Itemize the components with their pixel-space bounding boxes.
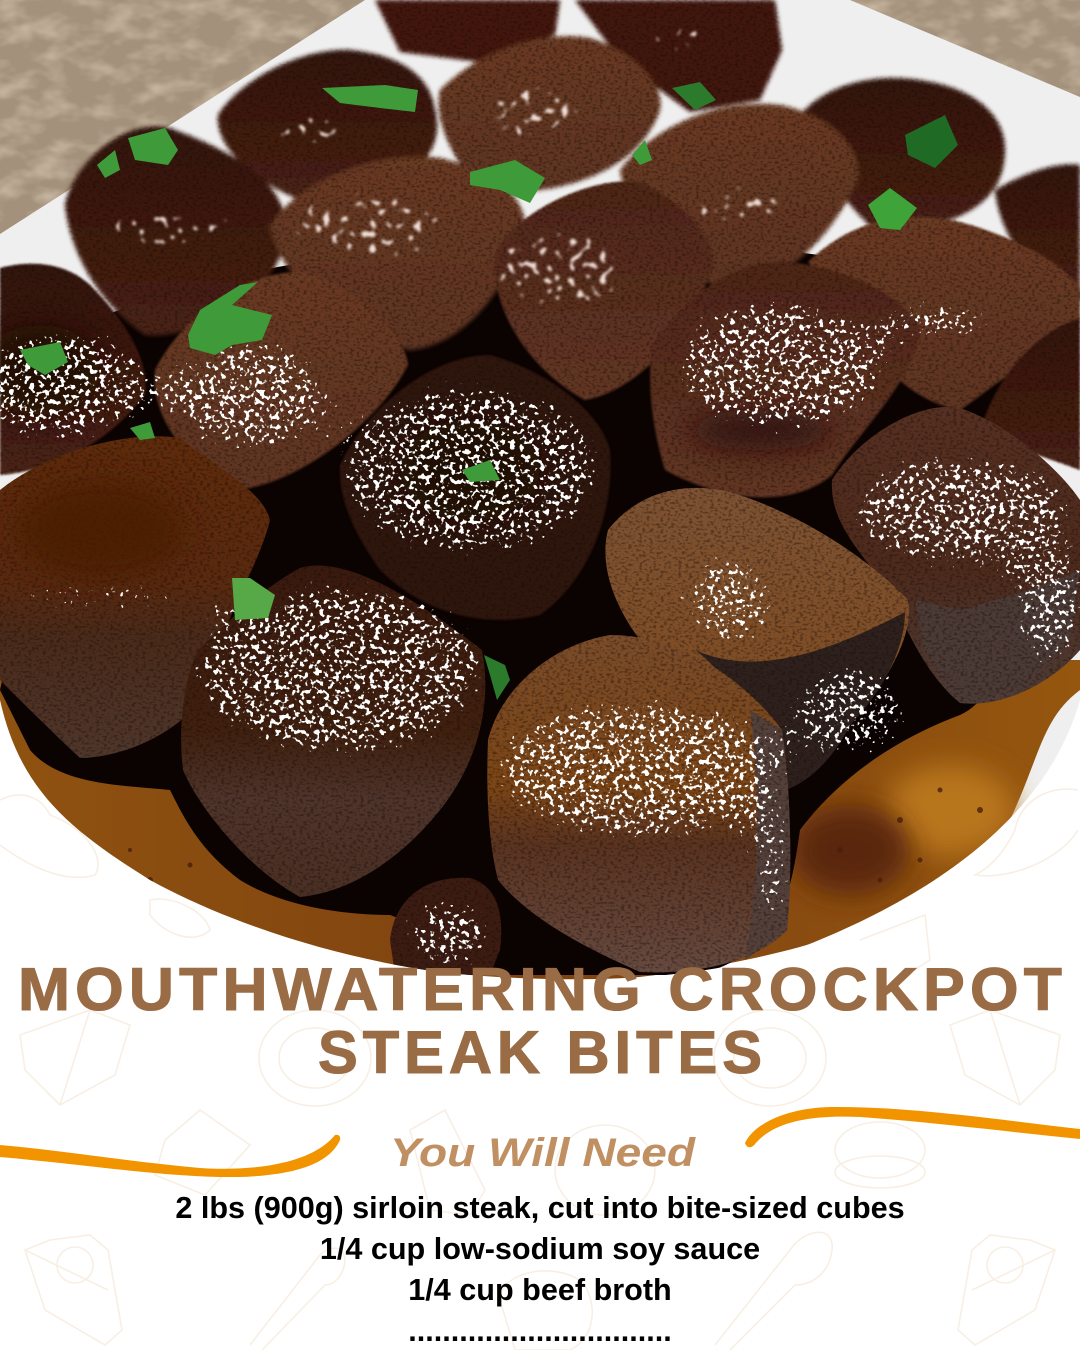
ingredient: steak: 2 lbs (900g) sirloin steak, cut into bite-sized cubes: [175, 1191, 905, 1225]
table background: [0, 0, 1080, 234]
green herb garnishes: [20, 82, 958, 700]
back row of steak bites, out of focus: [65, 0, 1080, 350]
all steak bites with grain texture: [0, 0, 1080, 975]
title line 1: MOUTHWATERING CROCKPOT: [18, 956, 1067, 1023]
title: Mouthwatering Crockpot Steak Bites: [18, 956, 1067, 1086]
middle row of steak bites: [0, 181, 1080, 620]
right orange swoosh: [745, 1107, 1080, 1147]
title line 2: STEAK BITES: [318, 1019, 767, 1086]
ingredient list: [175, 1191, 905, 1348]
bright sauce highlight: [885, 765, 1015, 855]
white glaze highlights on the in-focus bites: [0, 285, 1080, 985]
dark sauce patch: [790, 805, 910, 895]
ingredient: soy sauce: 1/4 cup low-sodium soy sauce: [320, 1232, 760, 1266]
dark centre shadow under the meat: [0, 240, 1037, 975]
front row of steak bites: [0, 407, 1080, 975]
ingredient: beef broth: 1/4 cup beef broth: [408, 1273, 672, 1307]
sauce pepper flecks: [77, 788, 983, 883]
hero photo: steak bites on a white plate: [0, 0, 1080, 990]
white plate: [0, 0, 1080, 820]
faint food-doodle background pattern: [0, 789, 1078, 1350]
sauce pool: [0, 660, 1080, 990]
subheading: You Will Need: You Will Need: [390, 1131, 697, 1175]
left orange swoosh: [0, 1135, 340, 1177]
dotted continuation line: ...............................: [408, 1314, 672, 1348]
table mottled texture: [0, 0, 1080, 215]
dark glaze pools on top of the bites: [0, 325, 830, 580]
soft highlights on the out-of-focus back row: [114, 28, 778, 305]
